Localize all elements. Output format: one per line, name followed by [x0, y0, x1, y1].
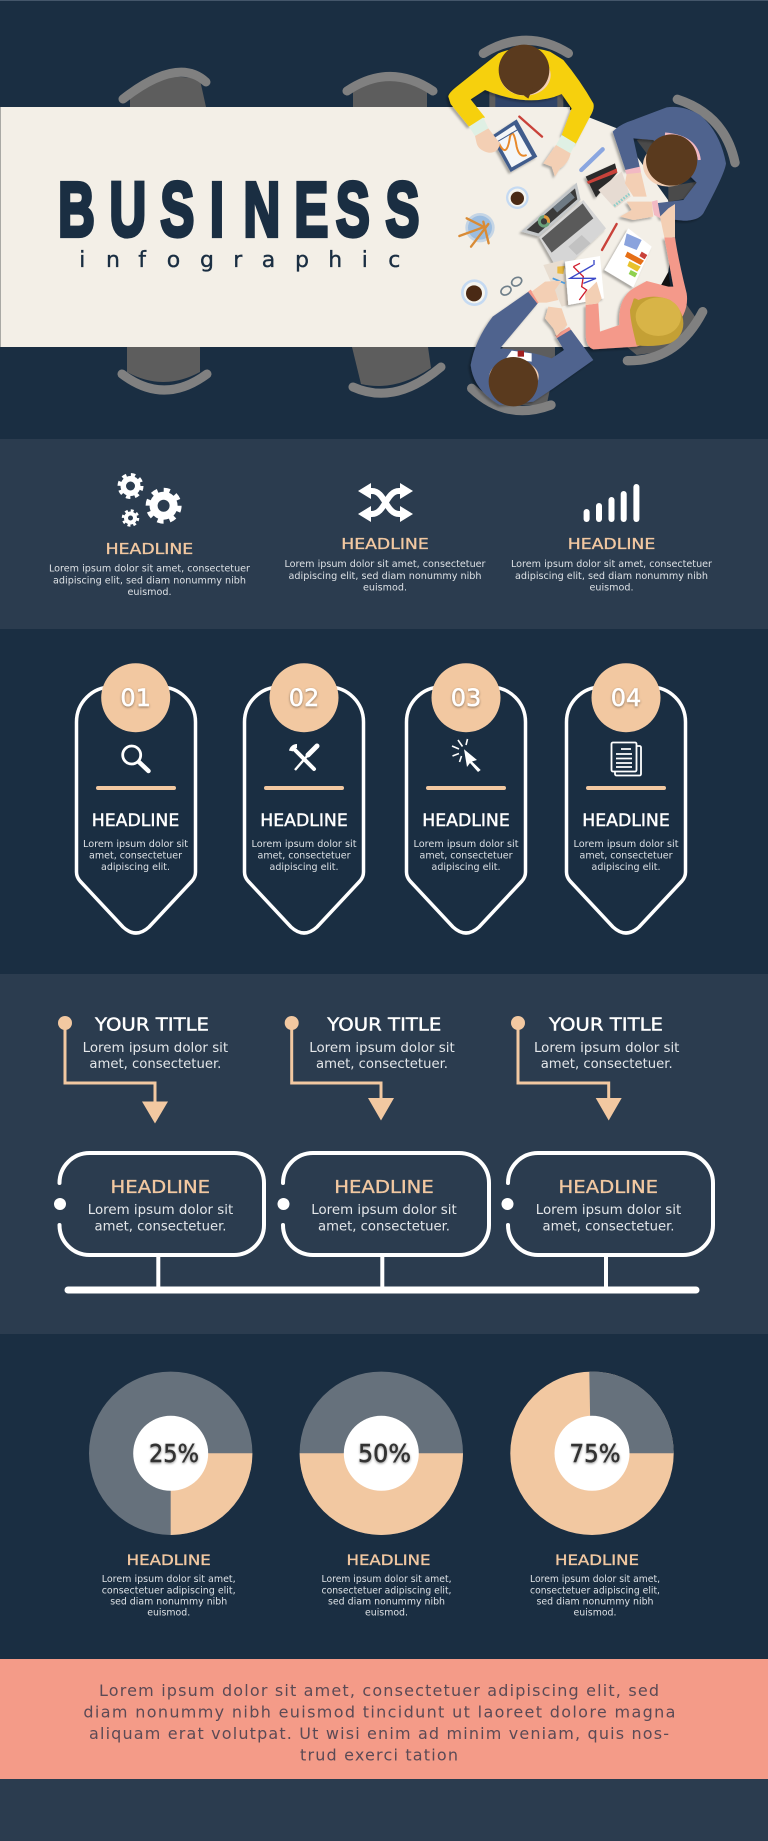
text block [284, 559, 486, 594]
box 3 [502, 1153, 713, 1255]
text block: amet, consectetuer. [89, 1056, 221, 1072]
number badge: 03 [451, 684, 481, 712]
text block: Lorem ipsum dolor sit amet, [530, 1574, 660, 1585]
chair: top left [123, 72, 206, 107]
heading: HEADLINE [346, 1553, 430, 1569]
text block: Lorem ipsum dolor sit [534, 1040, 679, 1056]
heading: HEADLINE [555, 1553, 639, 1569]
text block: euismod. [574, 1608, 616, 1619]
text block [536, 1202, 681, 1235]
text block: amet, consectetuer [420, 851, 513, 862]
pie chart 75% [510, 1372, 674, 1535]
box 2 [278, 1153, 489, 1255]
text block: adipiscing elit, sed diam nonummy nibh [53, 576, 246, 586]
text block [311, 1202, 457, 1235]
text block: sed diam nonummy nibh [536, 1596, 654, 1608]
text block [83, 1040, 228, 1072]
chair: lower right person [627, 271, 703, 361]
text block: Lorem ipsum dolor sit [536, 1202, 681, 1218]
text block [530, 1574, 660, 1619]
icon: cursor click [452, 739, 481, 772]
number badge: 02 [289, 684, 319, 712]
red pencil [602, 224, 617, 250]
text block: adipiscing elit. [592, 862, 660, 873]
text block: consectetuer adipiscing elit, [530, 1586, 660, 1596]
text block: euismod. [147, 1608, 190, 1619]
text block [414, 839, 519, 873]
panel: footer note [0, 1659, 768, 1779]
text block: Lorem ipsum dolor sit amet, consectetuer [49, 564, 251, 574]
coffee cup [461, 279, 488, 306]
text block: euismod. [128, 587, 172, 598]
text block: consectetuer adipiscing elit, [102, 1586, 236, 1596]
text block: amet, consectetuer. [541, 1056, 673, 1072]
panel: bottom band [0, 1779, 768, 1841]
arrow 3 [511, 1016, 622, 1120]
person: top, yellow [448, 45, 594, 177]
pie chart 50%: 50% [358, 1439, 411, 1468]
title: YOUR TITLE [326, 1016, 441, 1036]
chair: bottom person [472, 347, 555, 411]
text block: Lorem ipsum dolor sit [83, 1040, 228, 1056]
text block: euismod. [363, 582, 407, 594]
pie chart 25%: 25% [149, 1439, 199, 1468]
number badge [592, 663, 660, 732]
number badge: 01 [120, 684, 151, 712]
text block [102, 1574, 236, 1619]
chair: right person [637, 99, 735, 202]
chair: bottom left [122, 347, 207, 390]
text block: consectetuer adipiscing elit, [322, 1586, 452, 1596]
heading: HEADLINE [341, 535, 429, 553]
pencil cup [459, 213, 495, 247]
card 01 [76, 663, 196, 933]
pen [581, 149, 603, 170]
text block [88, 1202, 233, 1235]
text block [511, 559, 713, 594]
heading: HEADLINE [422, 811, 510, 830]
panel: hero [0, 0, 768, 439]
heading: HEADLINE [568, 535, 655, 553]
card 04 [566, 663, 686, 933]
notebooks [586, 163, 631, 208]
text block: amet, consectetuer. [316, 1056, 448, 1072]
text block: Lorem ipsum dolor sit [574, 839, 679, 850]
text block [574, 839, 679, 873]
text block: euismod. [365, 1608, 408, 1619]
text block: amet, consectetuer. [318, 1219, 450, 1235]
text block: Lorem ipsum dolor sit amet, [102, 1574, 236, 1585]
text block: sed diam nonummy nibh [328, 1596, 445, 1608]
number badge [270, 663, 338, 732]
text block: Lorem ipsum dolor sit [311, 1202, 457, 1218]
pie chart 50% [300, 1372, 463, 1535]
text block: amet, consectetuer. [542, 1219, 674, 1235]
panel: three features [0, 439, 768, 629]
text block [322, 1574, 452, 1619]
icon: shuffle arrows [358, 483, 413, 522]
bar chart sheet [604, 228, 652, 287]
meeting scene illustration [472, 40, 735, 411]
text block: Lorem ipsum dolor sit [414, 839, 519, 850]
heading: HEADLINE [334, 1178, 434, 1198]
heading: HEADLINE [127, 1553, 211, 1569]
meeting scene: people and desk items [448, 45, 726, 406]
title: BUSINESS: BUSINESS [58, 166, 419, 253]
number badge [432, 663, 500, 732]
icon: magnifier [123, 746, 148, 771]
text block: sed diam nonummy nibh [110, 1596, 227, 1608]
number badge [101, 663, 170, 732]
arrow 2 [285, 1016, 394, 1120]
text block: Lorem ipsum dolor sit [309, 1040, 455, 1056]
text block: Lorem ipsum dolor sit [252, 839, 357, 850]
person: bottom, blue suit [471, 281, 593, 406]
text block [83, 839, 188, 873]
text block: amet, consectetuer [89, 851, 183, 862]
text block: amet, consectetuer. [94, 1219, 226, 1235]
person: right, blue [613, 107, 726, 221]
line chart sheet [543, 256, 604, 307]
icon: documents [612, 742, 641, 776]
red pencil [519, 117, 542, 137]
number badge: 04 [611, 684, 641, 712]
timeline bar and stems [64, 1254, 700, 1294]
text block: Lorem ipsum dolor sit [88, 1202, 233, 1218]
icon: wrench and screwdriver [291, 746, 317, 770]
coffee cup [506, 186, 529, 209]
glasses [499, 276, 523, 297]
text block [83, 1681, 675, 1764]
heading: HEADLINE [582, 811, 670, 830]
pie chart 25% [89, 1372, 252, 1535]
subtitle: infographic: infographic [79, 248, 400, 273]
panel: titles and timeline [0, 974, 768, 1334]
panel: pie charts [0, 1334, 768, 1659]
title: YOUR TITLE [94, 1016, 209, 1036]
arrow 1 [58, 1016, 168, 1124]
person: lower right, salmon [585, 204, 687, 349]
text block [252, 839, 357, 873]
heading: HEADLINE [559, 1178, 658, 1198]
card 03 [406, 663, 526, 933]
text block: amet, consectetuer [258, 851, 351, 862]
heading: HEADLINE [260, 811, 348, 830]
chair: top person [483, 40, 568, 108]
text block [534, 1040, 679, 1072]
heading: HEADLINE [111, 1178, 210, 1198]
table [0, 107, 673, 347]
box 1 [54, 1153, 264, 1255]
text block: adipiscing elit. [432, 862, 500, 873]
panel: four numbered cards [0, 629, 768, 974]
text block: adipiscing elit. [101, 862, 170, 873]
icon: gears [120, 476, 179, 525]
text block: Lorem ipsum dolor sit amet, [322, 1574, 452, 1585]
text block: adipiscing elit, sed diam nonummy nibh [515, 571, 708, 582]
heading: HEADLINE [92, 811, 179, 830]
text block: euismod. [590, 582, 634, 594]
text block: aliquam erat volutpat. Ut wisi enim ad minim veniam, quis nos- [89, 1724, 669, 1743]
text block: diam nonummy nibh euismod tincidunt ut laoreet dolore magna [83, 1702, 675, 1722]
chair: bottom middle [352, 347, 441, 393]
text block: Lorem ipsum dolor sit [83, 839, 188, 850]
pie chart 75%: 75% [570, 1439, 620, 1468]
icon: signal bars [584, 484, 639, 522]
text block: amet, consectetuer [580, 851, 673, 862]
text block: trud exerci tation [300, 1746, 458, 1764]
laptop [521, 183, 606, 267]
text block: Lorem ipsum dolor sit amet, consectetuer [511, 559, 713, 570]
title: YOUR TITLE [548, 1016, 663, 1036]
text block: Lorem ipsum dolor sit amet, consectetuer [284, 559, 486, 570]
tablet [491, 119, 537, 172]
text block [49, 564, 251, 598]
text block: Lorem ipsum dolor sit amet, consectetuer adipiscing elit, sed [99, 1681, 659, 1700]
text block: adipiscing elit, sed diam nonummy nibh [288, 571, 482, 582]
heading: HEADLINE [106, 540, 193, 558]
chair: top middle [347, 76, 433, 107]
text block [309, 1040, 455, 1072]
text block: adipiscing elit. [270, 862, 338, 873]
card 02 [244, 663, 364, 933]
